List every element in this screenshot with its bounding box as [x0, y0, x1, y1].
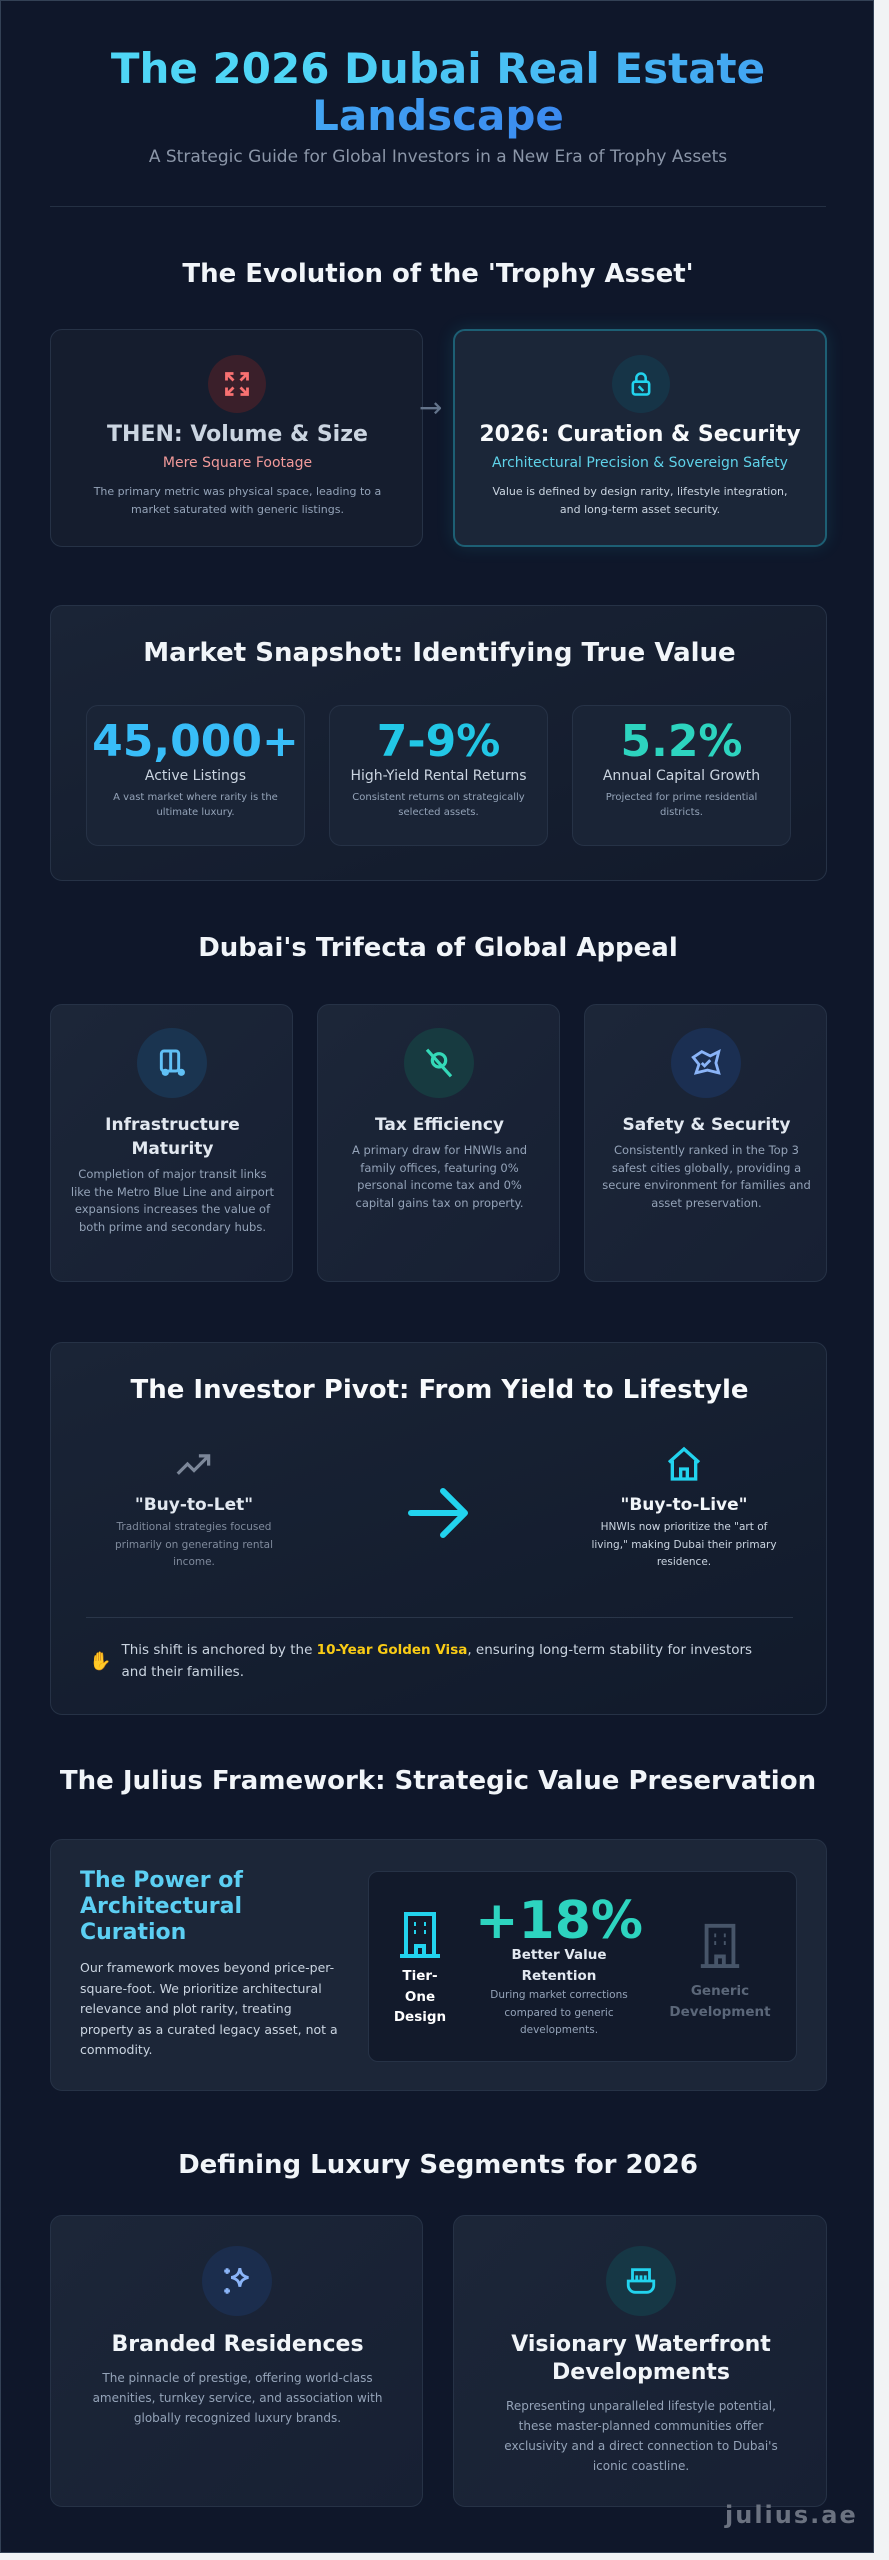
column: buy-to-live: "Buy-to-Live" — [620, 1495, 748, 1515]
text: architectural curation: Our framework moves beyond price-per-square-foot. We prioritize architectural relevance and plot rarity, treating property as a curated legacy asset, not a commodity. — [80, 1960, 338, 2057]
panel: investor pivot — [50, 1342, 827, 1715]
column: buy-to-let: "Buy-to-Let" — [135, 1495, 253, 1515]
text: 2026 — [479, 422, 801, 516]
subtitle: A Strategic Guide for Global Investors in a New Era of Trophy Assets — [149, 147, 727, 167]
chart box: value retention — [368, 1871, 797, 2062]
arrow: pivot — [408, 1488, 468, 1538]
text: 2026: 2026: Curation & Security — [479, 422, 801, 447]
stat: listings: 45,000+ — [92, 716, 299, 767]
icon: train — [137, 1028, 207, 1098]
text: waterfront: Developments — [552, 2360, 730, 2385]
icon: shield map — [671, 1028, 741, 1098]
stat: listings: A vast market where rarity is the ultimate luxury. — [113, 792, 278, 818]
card: then — [50, 329, 423, 547]
icon: generic building: Development — [669, 2004, 771, 2020]
card: infrastructure — [50, 1004, 293, 1282]
callout: golden visa: ✋ — [89, 1650, 111, 1672]
icon: generic building — [669, 1924, 771, 2020]
icon: waterfront — [606, 2246, 676, 2316]
text: branded: The pinnacle of prestige, offering world-class amenities, turnkey service, and association with globally recognized luxury brands. — [93, 2371, 382, 2425]
icon: tier-one building: Tier- — [402, 1968, 438, 1984]
stat: listings: Active Listings — [145, 768, 246, 784]
icon: sparkles — [202, 2246, 272, 2316]
stat: yield: High-Yield Rental Returns — [350, 768, 527, 784]
icon: no tax — [404, 1028, 474, 1098]
icon: expand — [208, 355, 266, 413]
stat: yield — [329, 705, 548, 846]
heading: market: Market Snapshot: Identifying True Value — [143, 638, 736, 668]
stat: +18% — [475, 1891, 643, 2036]
stat: +18%: During market corrections compared to generic developments. — [490, 1989, 628, 2036]
watermark: julius.ae — [725, 2501, 858, 2529]
text: tax: Tax Efficiency — [375, 1115, 504, 1135]
card: 2026 — [453, 329, 827, 547]
text: waterfront: Representing unparalleled lifestyle potential, these master-planned communities offer exclusivity and a direct connection to Dubai's iconic coastline. — [504, 2399, 778, 2473]
stat: +18%: +18% — [475, 1891, 643, 1951]
title: Landscape — [312, 91, 564, 140]
text: safety: Consistently ranked in the Top 3 safest cities globally, providing a secure environment for families and asset preservation. — [602, 1143, 811, 1210]
panel: framework — [50, 1839, 827, 2091]
title: The 2026 Dubai Real Estate — [111, 44, 765, 93]
heading: evolution: The Evolution of the 'Trophy Asset' — [182, 259, 694, 289]
heading: trifecta: Dubai's Trifecta of Global Appeal — [198, 933, 678, 963]
text: branded — [93, 2332, 382, 2425]
text: 2026: Value is defined by design rarity, lifestyle integration, and long-term asset security. — [492, 485, 788, 516]
text: infrastructure: Maturity — [131, 1139, 214, 1159]
card: branded residences — [50, 2215, 423, 2507]
stat: +18%: Better Value — [511, 1947, 607, 1963]
text: waterfront — [504, 2332, 778, 2473]
text: then: The primary metric was physical space, leading to a market saturated with generic listings. — [94, 485, 381, 516]
stat: +18%: Retention — [522, 1968, 596, 1984]
stat: growth — [572, 705, 791, 846]
stat: listings — [86, 705, 305, 846]
text: architectural curation: Architectural — [80, 1894, 242, 1919]
stat: growth: 5.2% — [620, 716, 743, 767]
text: infrastructure: Infrastructure — [105, 1115, 240, 1135]
callout: golden visa: This shift is anchored by the 10-Year Golden Visa, ensuring long-term stability for investors and their families. — [121, 1642, 752, 1680]
icon: tier-one building — [394, 1912, 446, 2025]
text: then — [94, 422, 381, 516]
text: architectural curation — [80, 1868, 338, 2057]
card: safety — [584, 1004, 827, 1282]
text: infrastructure — [71, 1115, 274, 1234]
card: tax — [317, 1004, 560, 1282]
text: architectural curation: Curation — [80, 1920, 186, 1945]
text: tax: A primary draw for HNWIs and family offices, featuring 0% personal income tax and 0% capital gains tax on property. — [352, 1143, 527, 1210]
icon: tier-one building: Design — [394, 2009, 446, 2025]
text: infrastructure: Completion of major transit links like the Metro Blue Line and airport expansions increases the value of both prime and secondary hubs. — [71, 1167, 274, 1234]
text: architectural curation: The Power of — [80, 1868, 243, 1893]
text: waterfront: Visionary Waterfront — [511, 2332, 771, 2357]
text: 2026: Architectural Precision & Sovereign Safety — [492, 455, 788, 471]
heading: pivot: The Investor Pivot: From Yield to Lifestyle — [130, 1375, 749, 1405]
column: buy-to-live — [591, 1446, 777, 1568]
card: waterfront — [453, 2215, 827, 2507]
text: then: THEN: Volume & Size — [107, 422, 368, 447]
text: then: Mere Square Footage — [163, 455, 312, 471]
icon: generic building: Generic — [691, 1983, 749, 1999]
column: buy-to-let: Traditional strategies focused primarily on generating rental income. — [115, 1521, 273, 1568]
heading: julius framework: The Julius Framework: Strategic Value Preservation — [60, 1766, 816, 1796]
stat: growth: Projected for prime residential districts. — [606, 792, 757, 818]
column: buy-to-let — [115, 1454, 273, 1568]
column: buy-to-live: HNWIs now prioritize the "art of living," making Dubai their primary residence. — [591, 1521, 777, 1568]
arrow: → — [419, 391, 442, 424]
stat: yield: 7-9% — [377, 716, 500, 767]
panel: market snapshot — [50, 605, 827, 881]
icon: tier-one building: One — [405, 1988, 435, 2004]
stat: growth: Annual Capital Growth — [603, 768, 760, 784]
title — [111, 44, 765, 140]
text: safety: Safety & Security — [623, 1115, 790, 1135]
text: branded: Branded Residences — [111, 2332, 364, 2357]
heading: luxury segments: Defining Luxury Segments for 2026 — [178, 2150, 698, 2180]
stat: yield: Consistent returns on strategically selected assets. — [352, 792, 525, 818]
icon: lock — [612, 355, 670, 413]
